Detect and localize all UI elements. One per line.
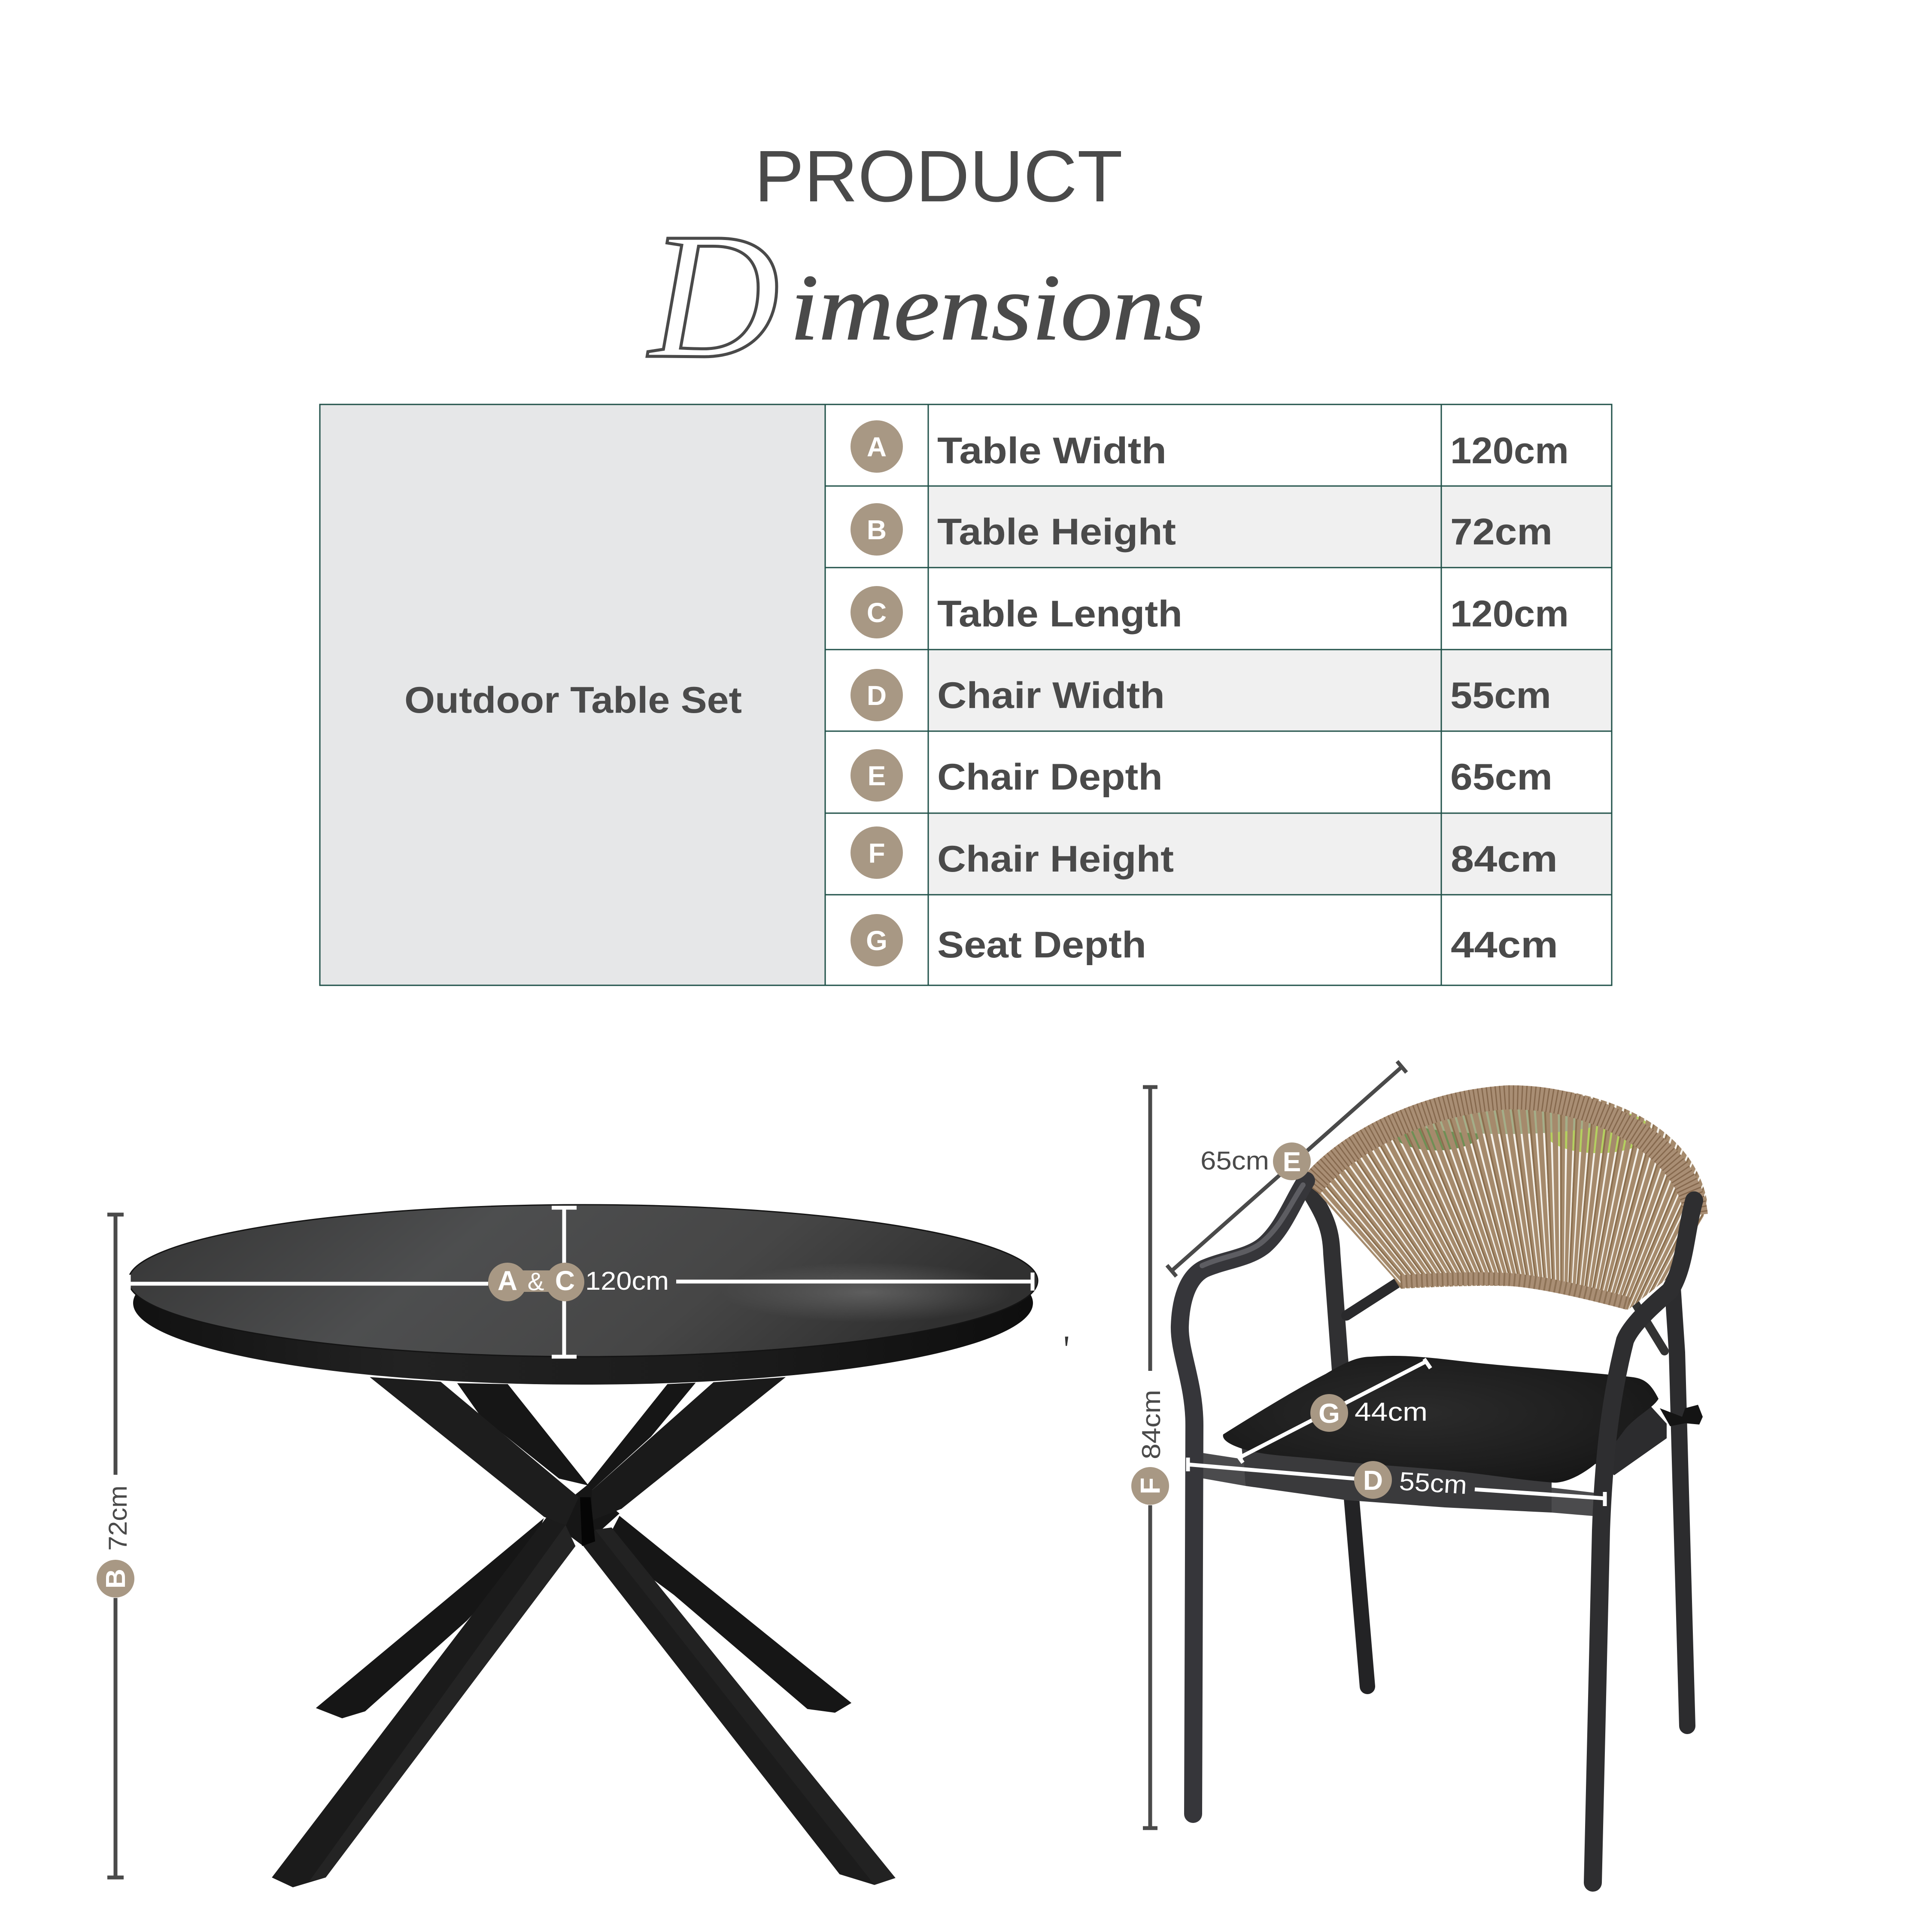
title: Dimensions script: imensions [790, 255, 1205, 360]
row C: Table Length [937, 593, 1182, 635]
row D: 55cm [1450, 675, 1551, 716]
row C: 120cm [1450, 593, 1569, 635]
dimension: A and C [129, 1208, 1033, 1357]
table grid [825, 404, 1612, 985]
dimension: D chair width [1188, 1458, 1605, 1506]
row D [851, 669, 1551, 721]
row F: 84cm [1451, 838, 1558, 880]
panel: product name cell [320, 404, 825, 985]
title: PRODUCT: PRODUCT [754, 136, 1123, 217]
row B [851, 503, 1552, 556]
row B: 72cm [1450, 511, 1552, 553]
row G: G [866, 925, 887, 956]
dimension: G seat depth: G [1318, 1398, 1340, 1429]
table legs [272, 1337, 1068, 1887]
dimension: A and C: & [528, 1268, 544, 1296]
row E: 65cm [1450, 756, 1552, 798]
dimension: E chair depth: E [1283, 1146, 1301, 1177]
left arm highlight [1202, 1185, 1303, 1266]
dimension: A and C: C [555, 1265, 575, 1296]
dimension: A and C: 120cm [585, 1267, 669, 1295]
table glass top [128, 1205, 1038, 1357]
row A: 120cm [1450, 430, 1569, 471]
front left arm and leg [1180, 1181, 1306, 1814]
product image: chair [1170, 1085, 1708, 1892]
dimension: B table height: 72cm [103, 1485, 132, 1551]
dimension: F chair height [1131, 1087, 1169, 1828]
seat cushion [1223, 1356, 1659, 1482]
dimension: F chair height: F [1135, 1477, 1166, 1495]
product image: round table [128, 1205, 1068, 1887]
table rim [133, 1221, 1033, 1385]
row B: B [867, 514, 887, 545]
dimension: A and C: A [498, 1265, 517, 1296]
title: Dimensions script: D [646, 196, 779, 395]
row G [851, 914, 1558, 966]
dimension: G seat depth [1236, 1359, 1431, 1463]
row G: Seat Depth [937, 924, 1146, 966]
panel: product name cell: Outdoor Table Set [404, 680, 742, 721]
dimensions table [320, 404, 1612, 985]
row D: D [867, 680, 887, 711]
dimension: B table height: B [100, 1569, 131, 1589]
dimension: F chair height: 84cm [1137, 1390, 1166, 1459]
back legs and uprights [1309, 1189, 1687, 1726]
dimension: E chair depth [1167, 1061, 1406, 1276]
row C: C [867, 597, 887, 628]
row F: F [868, 838, 885, 869]
row A: A [867, 431, 887, 462]
row E [851, 749, 1552, 802]
shaded rows [928, 486, 1612, 895]
row F [851, 826, 1558, 880]
cushion tie [1660, 1405, 1703, 1426]
woven backrest [1308, 1085, 1708, 1309]
row B: Table Height [937, 511, 1176, 553]
dimension: D chair width: D [1363, 1465, 1383, 1496]
row A [851, 420, 1569, 473]
row F: Chair Height [937, 838, 1174, 880]
row G: 44cm [1451, 924, 1558, 966]
row A: Table Width [937, 430, 1166, 471]
row D: Chair Width [937, 675, 1165, 716]
row E: Chair Depth [937, 756, 1163, 798]
seat sling and frame [1194, 1404, 1667, 1516]
dimension: E chair depth: 65cm [1200, 1146, 1269, 1175]
front right arm and leg [1593, 1200, 1694, 1883]
row E: E [868, 760, 886, 791]
dimension: G seat depth: 44cm [1355, 1397, 1428, 1426]
dimension: B table height [97, 1215, 134, 1877]
row C [851, 586, 1569, 638]
glass highlight [721, 1262, 1013, 1322]
dimension: D chair width: 55cm [1398, 1467, 1468, 1500]
